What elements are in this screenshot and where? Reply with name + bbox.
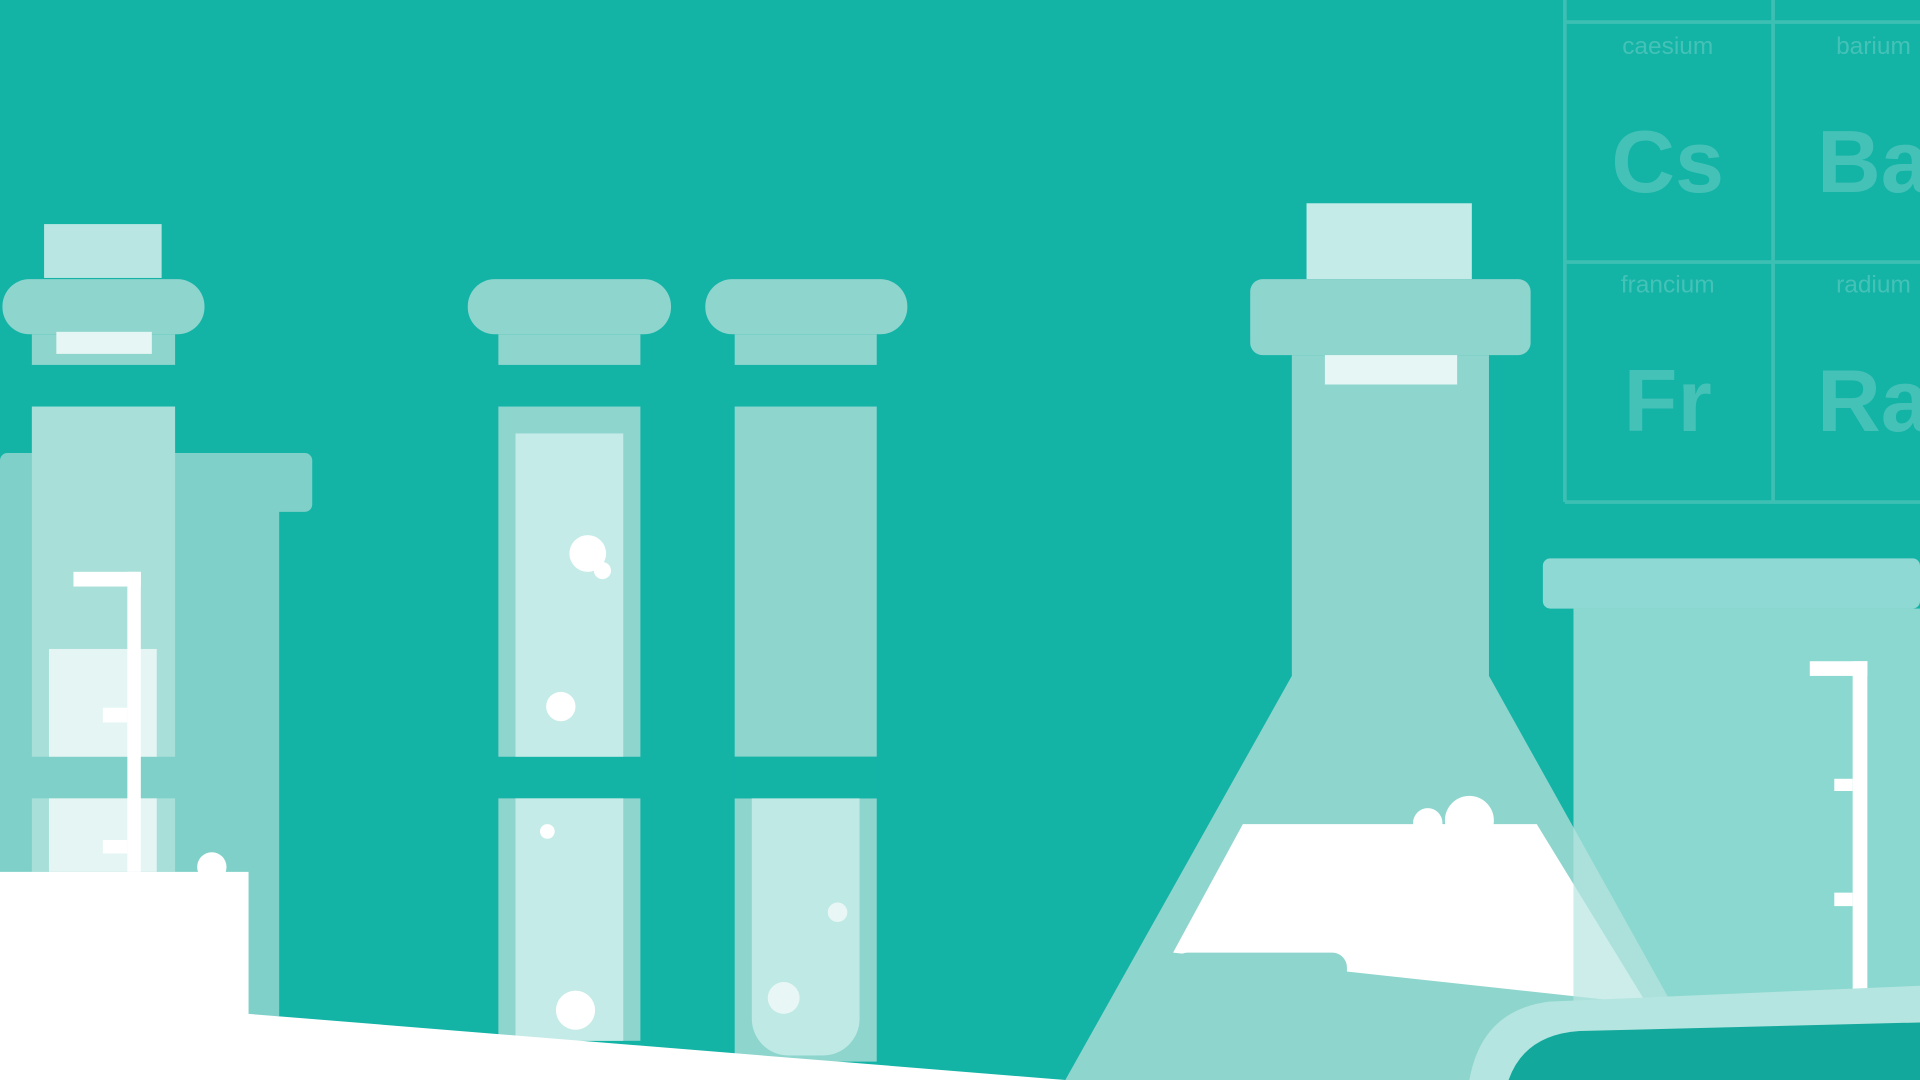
periodic table: Fr [1624, 351, 1712, 450]
periodic table: radium [1836, 272, 1911, 299]
periodic table: francium [1621, 272, 1715, 299]
periodic table: Cs [1611, 112, 1724, 211]
ground white [0, 872, 1065, 1080]
dish bottom right [1469, 986, 1920, 1080]
periodic table: caesium [1622, 33, 1713, 60]
left test tube [2, 224, 204, 872]
right beaker [1543, 558, 1920, 1080]
tube 2 [468, 279, 671, 1041]
periodic table: barium [1836, 33, 1911, 60]
left beaker [0, 453, 312, 1016]
tube 3 [705, 279, 907, 1062]
conical flask [1065, 203, 1714, 1080]
left ruler [73, 572, 141, 872]
periodic table [1565, 0, 1920, 502]
